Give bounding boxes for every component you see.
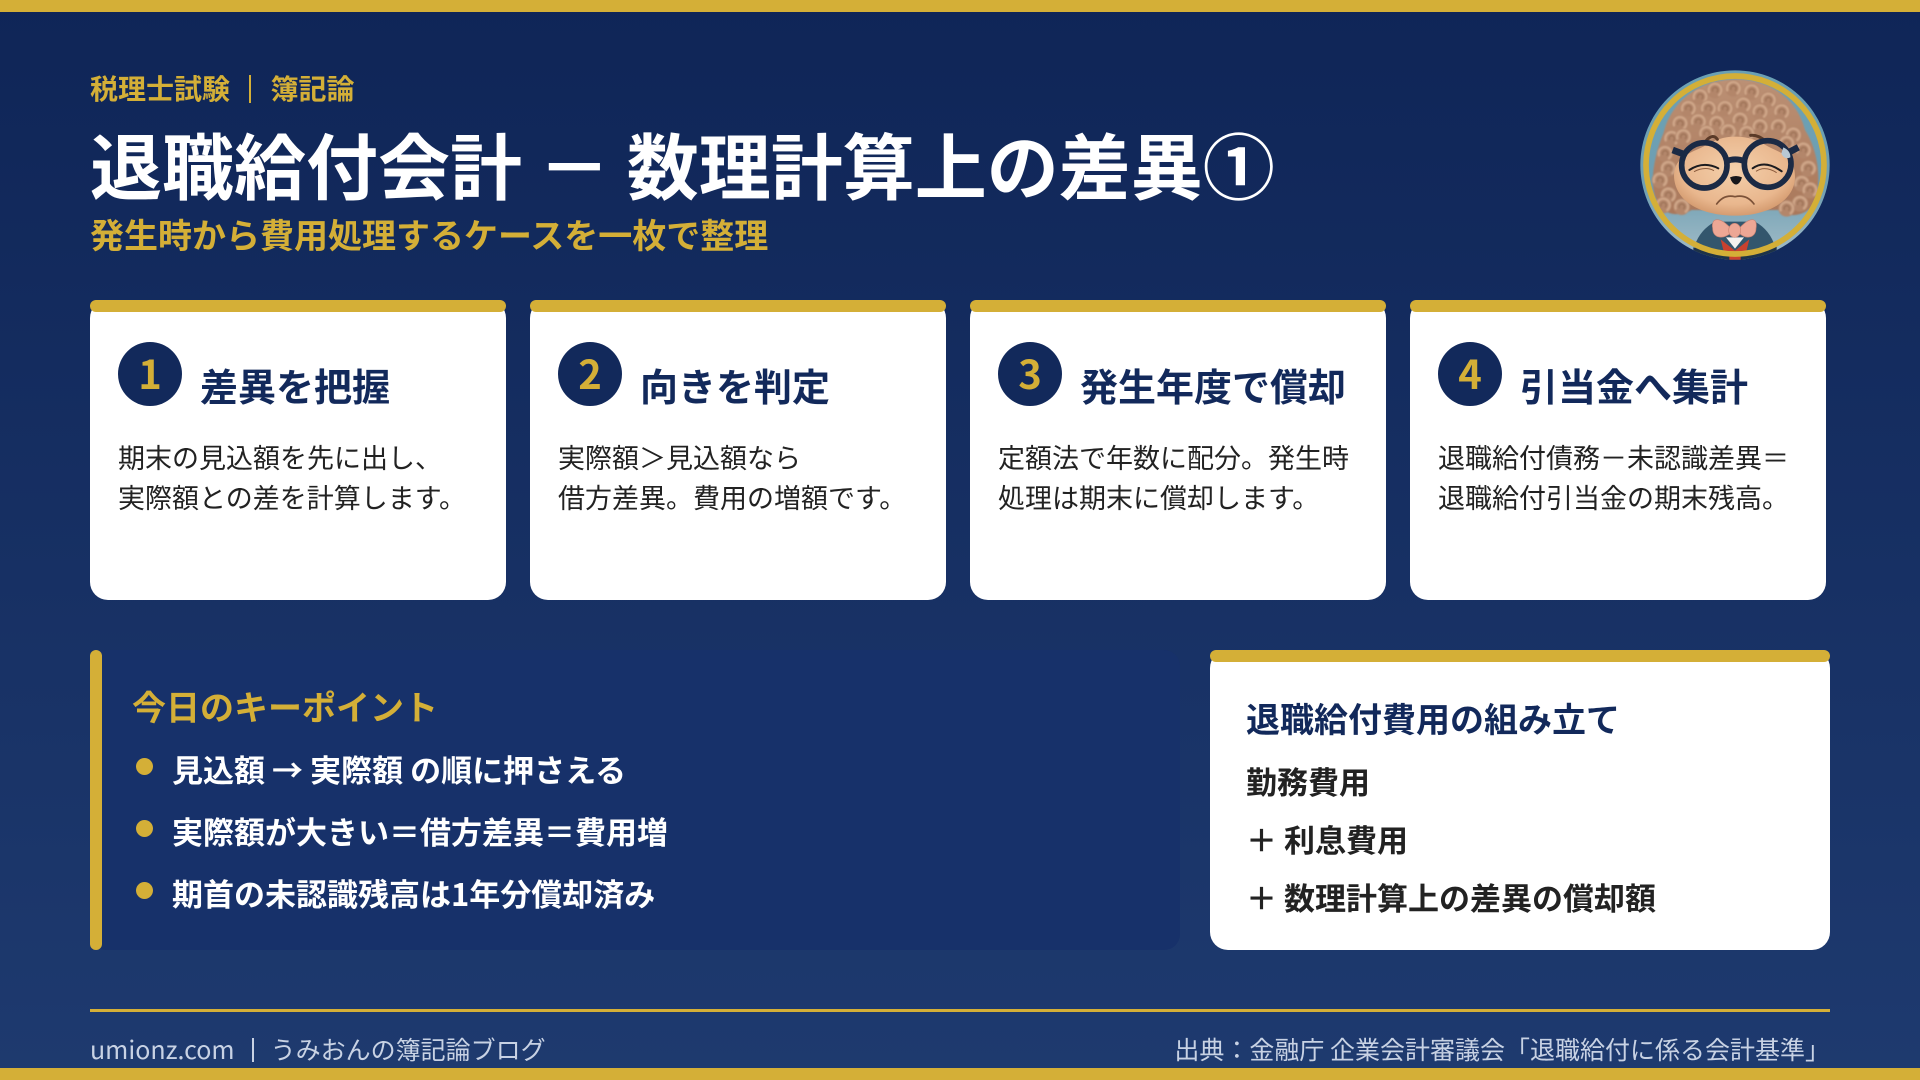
closed eyes xyxy=(1689,165,1718,170)
card 1 xyxy=(90,300,506,600)
sweat drop xyxy=(1781,147,1790,158)
top gold band xyxy=(0,0,1920,12)
nose and mouth xyxy=(1730,176,1742,185)
card 1 heading: 差異を把握 xyxy=(200,357,390,412)
bow tie xyxy=(1712,220,1756,237)
number badge 3: 3 xyxy=(1018,343,1042,401)
main title: 退職給付会計 － 数理計算上の差異① xyxy=(90,110,1275,215)
footer right: source: 出典：金融庁 企業会計審議会「退職給付に係る会計基準」 xyxy=(1174,1031,1830,1067)
item: interest cost: ＋ 利息費用 xyxy=(1246,816,1408,861)
card 4 accent bar xyxy=(1410,300,1826,312)
card 3 body: 定額法で年数に配分。発生時 xyxy=(998,436,1349,476)
gold ring xyxy=(1646,76,1824,254)
number badge 1 xyxy=(118,342,182,406)
card 2 body: 借方差異。費用の増額です。 xyxy=(558,476,906,516)
item: amortization: ＋ 数理計算上の差異の償却額 xyxy=(1246,874,1656,918)
number badge 4: 4 xyxy=(1458,343,1482,401)
number badge 2: 2 xyxy=(578,343,602,401)
curly hair xyxy=(1652,79,1818,217)
category label: 税理士試験 簿記論 xyxy=(90,68,355,108)
card 2 accent bar xyxy=(530,300,946,312)
bullet 2 marker xyxy=(136,820,153,837)
card 3 heading: 発生年度で償却 xyxy=(1080,357,1346,412)
card 4 body xyxy=(1438,436,1789,516)
card 3 body: 処理は期末に償却します。 xyxy=(998,476,1319,516)
card 1 body: 期末の見込額を先に出し、 xyxy=(118,436,442,476)
number badge 4 xyxy=(1438,342,1502,406)
bullet 3 text: 期首の未認識残高は1年分償却済み xyxy=(172,870,655,915)
card 1 body xyxy=(118,436,466,516)
composition accent bar xyxy=(1210,650,1830,662)
card 2 heading: 向きを判定 xyxy=(640,357,830,412)
number badge 3 xyxy=(998,342,1062,406)
panel: key points xyxy=(90,650,1180,950)
bullet 1 marker xyxy=(136,758,153,775)
subtitle: 発生時から費用処理するケースを一枚で整理 xyxy=(90,209,768,258)
number badge 1: 1 xyxy=(138,343,162,401)
card 2 body xyxy=(558,436,906,516)
face xyxy=(1674,137,1795,216)
item: service cost: 勤務費用 xyxy=(1246,758,1370,803)
card 3 body xyxy=(998,436,1349,516)
card 3 accent bar xyxy=(970,300,1386,312)
card 4 heading: 引当金へ集計 xyxy=(1520,357,1748,412)
icon: curly-haired character avatar xyxy=(1640,70,1830,260)
bottom gold band xyxy=(0,1068,1920,1080)
card 1 accent bar xyxy=(90,300,506,312)
bullet 1 text: 見込額 → 実際額 の順に押さえる xyxy=(172,746,626,791)
panel: expense composition xyxy=(1210,650,1830,950)
composition heading: 退職給付費用の組み立て xyxy=(1246,693,1620,742)
card 2 xyxy=(530,300,946,600)
card 1 body: 実際額との差を計算します。 xyxy=(118,476,466,516)
bullet 3 marker xyxy=(136,882,153,899)
card 4 body: 退職給付引当金の期末残高。 xyxy=(1438,476,1789,516)
key points heading: 今日のキーポイント xyxy=(132,681,438,730)
key points accent bar xyxy=(90,650,102,950)
card 2 body: 実際額＞見込額なら xyxy=(558,436,801,476)
glasses xyxy=(1673,141,1798,188)
footer left: site name: umionz.com うみおんの簿記論ブログ xyxy=(90,1031,546,1067)
card 4 xyxy=(1410,300,1826,600)
footer rule xyxy=(90,1009,1830,1012)
number badge 2 xyxy=(558,342,622,406)
card 3 xyxy=(970,300,1386,600)
bullet 2 text: 実際額が大きい＝借方差異＝費用増 xyxy=(172,808,668,853)
card 4 body: 退職給付債務－未認識差異＝ xyxy=(1438,436,1789,476)
